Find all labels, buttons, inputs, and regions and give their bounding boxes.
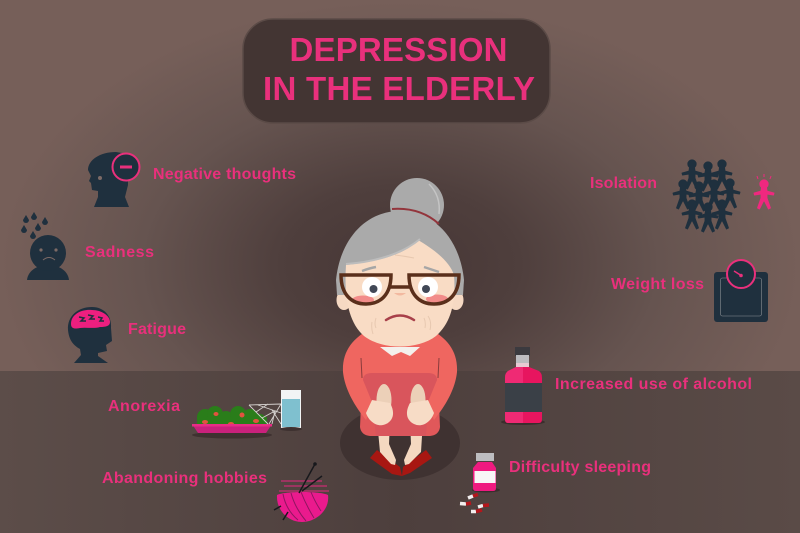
symptom: abandoning hobbies [102,462,329,522]
icon: ball of wool and knitting needles [274,462,329,522]
label: Isolation [590,175,657,192]
title text [263,31,535,107]
icon: head with minus sign [88,152,140,207]
symptom: difficulty sleeping [460,453,651,512]
face [346,240,454,346]
symptom: sadness [21,212,154,280]
title text: IN THE ELDERLY [263,70,535,107]
background floor [0,371,800,533]
icon: plate of salad, cobweb and glass of water [192,390,302,438]
hands [366,400,434,425]
label: Anorexia [108,398,180,415]
label: Difficulty sleeping [509,459,651,476]
label: Abandoning hobbies [102,470,267,487]
label: Increased use of alcohol [555,376,752,393]
mouth [386,316,414,320]
collar [380,347,420,356]
symptom: anorexia [108,390,302,438]
icon: crowd of people [673,160,740,232]
hair bun [390,178,444,232]
icon: lone pink person [754,174,774,209]
icon: liquor bottle [501,347,545,425]
nose [394,293,406,296]
icon: head with brain and lightning [68,307,112,363]
shoes [370,450,432,476]
icon: sad face with rain drops [21,212,69,280]
eyes [362,277,438,297]
pills [460,494,489,512]
legs [377,420,423,465]
label: Fatigue [128,321,186,338]
symptom: increased use of alcohol [501,347,752,425]
ears [336,290,352,310]
title panel [243,19,550,123]
grandmother character [336,178,464,480]
symptom: fatigue [68,307,186,363]
label: Sadness [85,244,154,261]
arm lines [361,358,439,378]
blush [352,296,374,304]
wrinkles [372,255,431,334]
glasses [341,275,459,304]
symptom: weight loss [611,260,768,322]
symptom: isolation [590,160,774,232]
label: Weight loss [611,276,704,293]
lap [363,373,437,436]
hair fringe highlight [346,239,420,264]
symptom: negative thoughts [88,152,296,207]
floor shadow [340,406,460,480]
icon: bathroom scale [714,260,768,322]
knees [376,384,392,416]
icon: pill bottle and pills [460,453,500,512]
label: Negative thoughts [153,166,296,183]
title text: DEPRESSION [290,31,508,68]
background wall [0,0,800,372]
dress body [343,328,457,420]
eyebrows [362,267,439,272]
chair seat / skirt [360,405,440,436]
hair back [336,211,464,295]
